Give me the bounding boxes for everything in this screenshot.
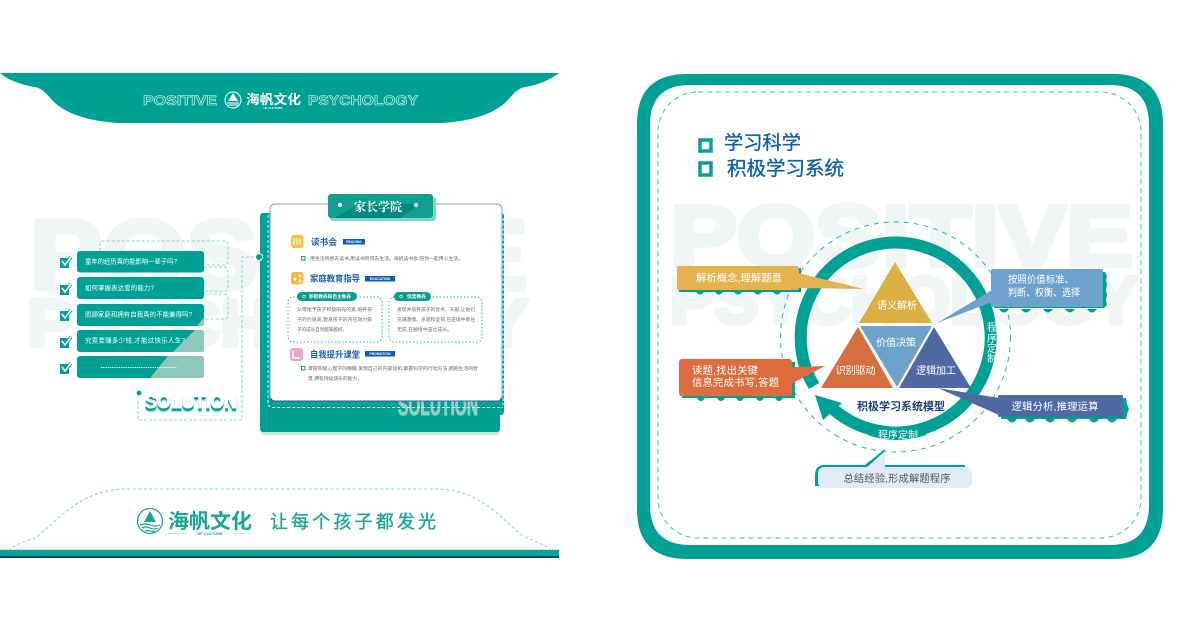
triangle: value decision: 价值决策 [876,336,916,349]
vertical label: program customization: 定 [987,342,997,355]
banner word: psychology: PSYCHOLOGY [308,92,419,108]
left panel background watermark [27,200,528,360]
callout: identify drive: 读题,找出关键 [692,364,759,377]
section: reading club: 用生活所感去读书,用读书所得去生活。海帆读书会,陪你一起用心生活。 [310,255,463,262]
section: self improvement class: PROMOTION [370,352,391,356]
header tab: 家长学院 [354,199,402,214]
banner logo subtitle: HF CULTURE [264,106,282,110]
banner word: positive: POSITIVE [143,92,217,108]
connector dot [256,254,262,260]
logo icon [138,508,162,534]
triangle: semantic analysis [859,262,932,323]
callout: identify drive [679,359,825,401]
question 4: 究竟要赚多少钱,才能过快乐人生? [85,336,185,344]
triangle: semantic analysis: 语义解析 [877,299,917,312]
box: positive parenting: 积极教养和自主教养 [309,293,352,300]
box: positive parenting: 子的价值观,激发孩子的内在动力孩 [297,316,372,323]
vertical label: program customization: 序 [987,332,997,345]
question 3: 照顾家庭和拥有自我真的不能兼得吗? [85,310,192,318]
box: positive parenting [288,292,382,342]
question list [60,251,204,378]
callout: value decision: 按照价值标准、 [1008,273,1074,286]
circular arrow ring [801,243,991,439]
bottom band [0,549,559,558]
solution heading: SOLUTION [145,396,237,417]
triangle: identify drive: 识别驱动 [836,365,876,377]
top banner [0,73,559,123]
outer dashed circle [780,222,1010,452]
right panel frame [637,74,1163,559]
card white panel [270,204,502,401]
left panel background watermark: PSYCHOLOGY [27,286,528,360]
question 4 [60,330,204,352]
triangle: value decision [860,326,932,387]
bottom label: program customization: 程序定制 [878,428,918,442]
section: self improvement class: 掌握积极心理学的精髓,发现自己的内部动机,掌握科学的行动方法,拥抱生活的智 [308,365,478,372]
parent academy card [256,194,504,435]
callout: semantic analysis [677,266,864,294]
model title: 积极学习系统模型 [857,399,945,413]
question 5 [60,356,204,378]
box: strength parenting [389,292,482,342]
dashed connectors around questions [100,241,259,420]
callout: logic processing: 逻辑分析,推理运算 [1012,400,1098,413]
question 2 [60,277,204,299]
right panel background watermark: PSYCHOLOGY [670,263,1138,337]
bottom logo [138,508,252,536]
vertical label: program customization: 制 [987,352,997,365]
right panel background watermark: POSITIVE [670,189,1133,285]
header tab [328,194,436,221]
section: family education guidance: EDUCATION [370,277,391,281]
card backing layers: SOLUTION [398,390,478,421]
slogan: 让每个孩子都发光 [270,512,436,532]
callout: value decision [937,269,1107,323]
callout: summarize experience: 总结经验,形成解题程序 [844,472,950,485]
question 1: 童年的经历真的能影响一辈子吗? [85,256,177,266]
box: positive parenting: 父母给予孩子积极阳光的爱,培养孩 [297,306,372,313]
box: strength parenting: 充满激情、乐观和坚韧,在逆境中勇往 [397,316,475,323]
heading: positive learning system: 积极学习系统 [727,158,844,180]
bottom dashed curve [3,489,556,553]
banner logo icon [225,92,241,108]
right panel background watermark [670,189,1138,337]
section: reading club: READING [346,240,362,244]
box: positive parenting: 子的成长自然越来越好。 [297,326,347,333]
callout: semantic analysis: 解析概念,理解题意 [696,272,782,284]
section: self improvement class: 自我提升课堂 [310,348,360,360]
section: family education guidance: 家庭教育指导 [310,272,360,284]
vertical label: program customization: 程 [987,322,997,334]
logo name: 海帆文化 [168,509,252,533]
vertical label: program customization [987,322,997,365]
section: reading club: 读书会 [311,236,337,247]
solution heading: SOLUTION [145,392,237,413]
triangle model [821,262,971,388]
question 3 [60,304,204,326]
box: strength parenting: 无前,在顺境中茁壮成长。 [397,326,452,333]
triangle: identify drive [821,327,893,388]
section: reading club [291,235,463,262]
callout: identify drive: 信息完成书写,答题 [692,376,779,389]
box: strength parenting: 发现并培养孩子的优点、天赋,让他们 [397,306,475,313]
left panel background watermark: POSITIVE [30,200,528,310]
question 2: 如何掌握表达爱的能力? [85,283,154,292]
triangle: logic processing: 逻辑加工 [916,364,956,377]
solution heading: SOLUTION [145,394,237,416]
callout: value decision: 判断、权衡、选择 [1008,286,1081,299]
question 1 [60,251,204,272]
triangle: logic processing [899,327,971,388]
section: self improvement class: 慧,拥有持续快乐的能力。 [308,375,362,382]
callout: logic processing [938,388,1129,422]
card backing layers [260,213,504,435]
section: self improvement class [290,348,478,382]
box: strength parenting: 优势教养 [407,293,427,300]
logo subtitle: HF CULTURE [197,531,223,536]
heading: learning science: 学习科学 [724,132,801,154]
banner logo name: 海帆文化 [246,92,301,107]
callout: summarize experience [815,449,972,488]
section: family education guidance [288,272,482,342]
